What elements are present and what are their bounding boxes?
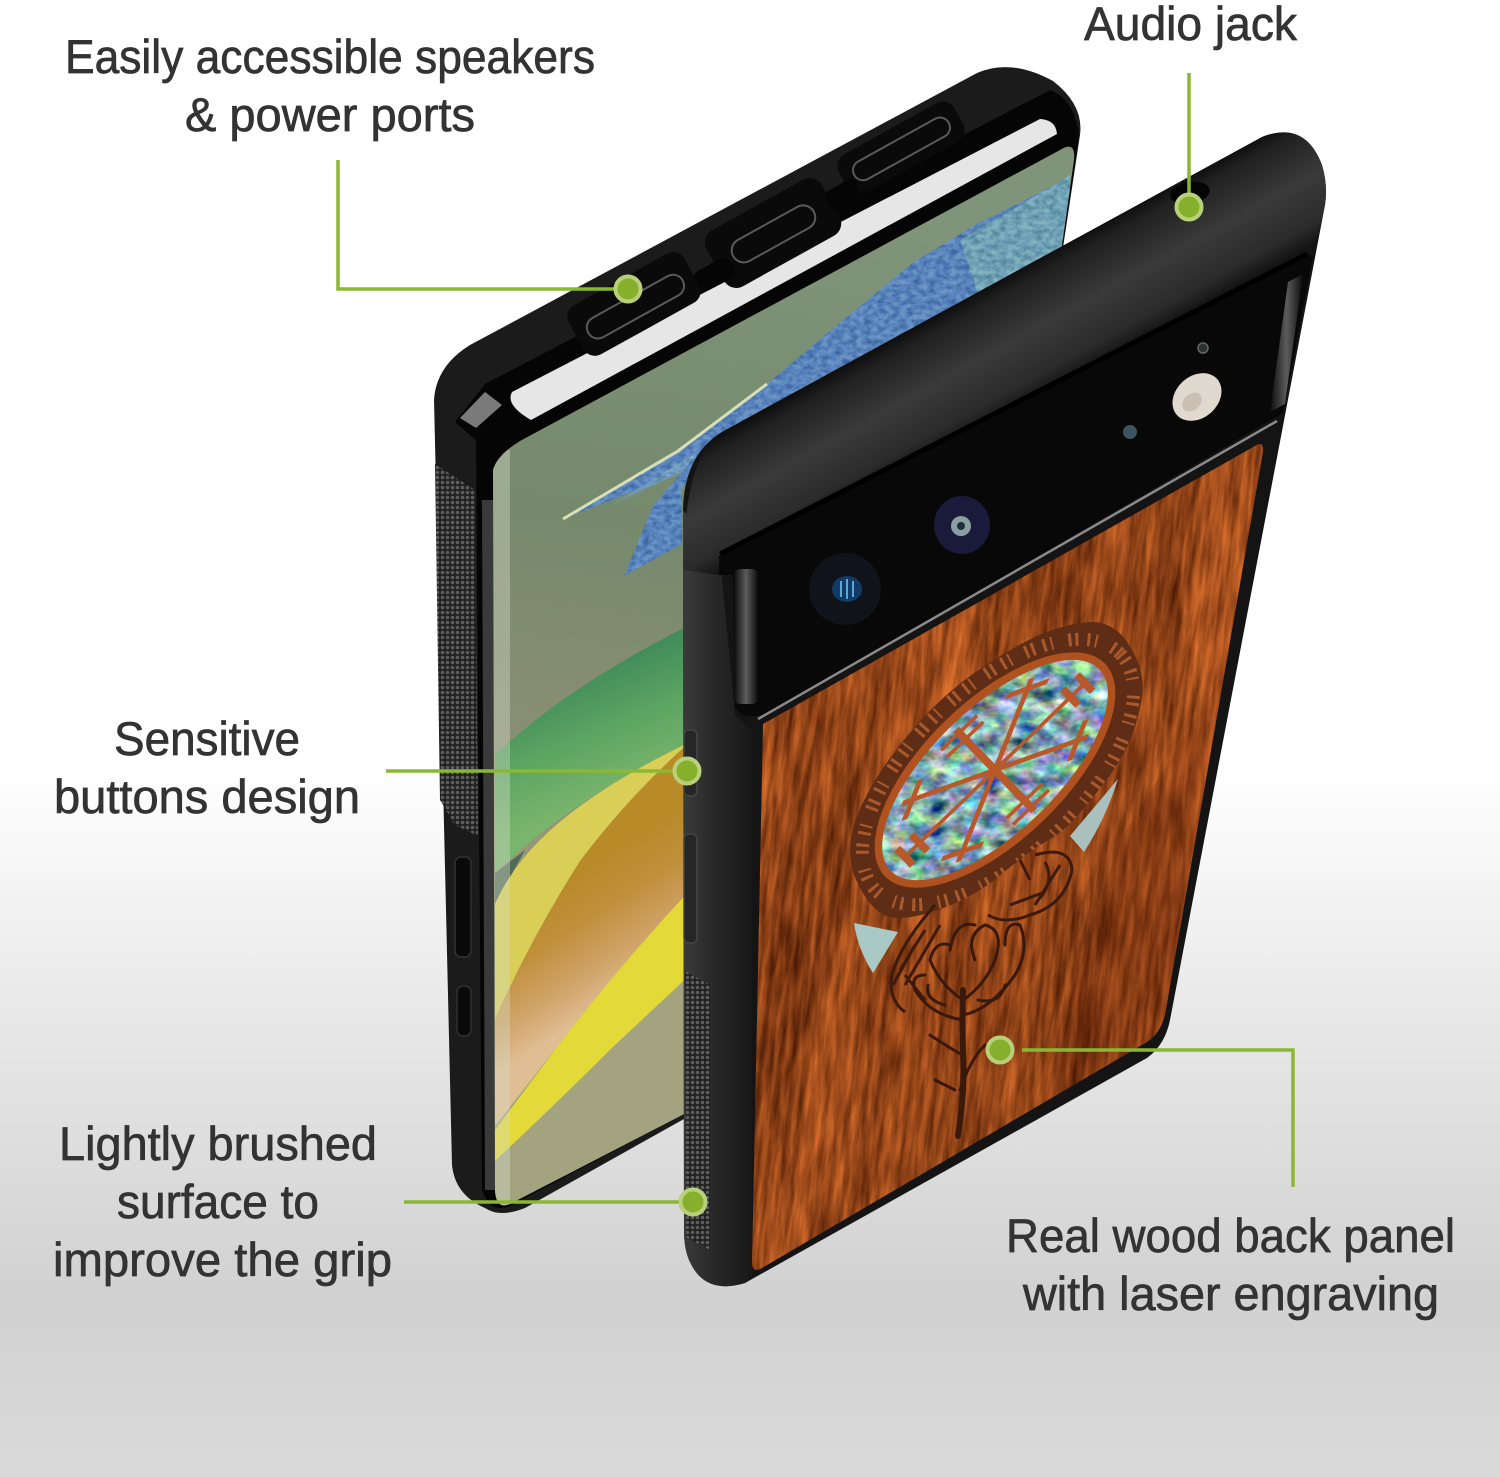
speaker and port cutouts bbox=[563, 97, 969, 360]
green leaf bbox=[495, 625, 690, 873]
engraved compass medallion bbox=[850, 622, 1143, 973]
pale lower screen bbox=[495, 975, 690, 1210]
inner wood rim bbox=[874, 652, 1116, 888]
front view phone bbox=[434, 67, 1090, 1215]
connector line bbox=[1187, 73, 1191, 195]
side inner strip bbox=[482, 500, 495, 1190]
top band of case bbox=[683, 132, 1326, 575]
glossy inner bezel bbox=[455, 90, 1079, 1208]
abalone triangle left bbox=[854, 923, 898, 973]
bright yellow leaf bbox=[495, 890, 690, 1161]
dark leaf shadow bbox=[495, 850, 525, 905]
abalone inlay bbox=[882, 660, 1108, 880]
connector line bbox=[338, 160, 614, 289]
matte case shell bbox=[683, 132, 1326, 1286]
abalone triangle right bbox=[1070, 779, 1118, 852]
bar top lip bbox=[720, 254, 1307, 554]
rune ring bbox=[850, 622, 1143, 918]
small sensor bbox=[1123, 425, 1137, 439]
label bbox=[65, 30, 595, 141]
connector line bbox=[386, 769, 674, 773]
marker dot bbox=[1176, 194, 1202, 220]
label bbox=[54, 712, 360, 823]
marker dot bbox=[674, 758, 700, 784]
label: Real wood back panel bbox=[1006, 1209, 1455, 1262]
connector line bbox=[1022, 1050, 1293, 1187]
callout: real wood panel bbox=[988, 1038, 1455, 1320]
vegvisir strokes bbox=[894, 672, 1096, 868]
label: Sensitive bbox=[114, 712, 300, 765]
dragon engraving bbox=[891, 852, 1072, 1012]
grip texture bbox=[685, 971, 710, 1250]
glossy bar end left bbox=[734, 569, 758, 704]
pale yellow leaf edge bbox=[495, 742, 690, 1019]
label: with laser engraving bbox=[1022, 1267, 1439, 1320]
phone case outer shell bbox=[434, 67, 1080, 1213]
rear main lens bbox=[809, 553, 881, 625]
side buttons bbox=[455, 857, 471, 1036]
label: buttons design bbox=[54, 770, 360, 823]
marker dot bbox=[616, 276, 640, 302]
tree of life engraving bbox=[914, 924, 1024, 1136]
label bbox=[1006, 1209, 1455, 1320]
wood back panel bbox=[752, 444, 1264, 1270]
screen wallpaper bbox=[490, 140, 1090, 1215]
callout: brushed grip bbox=[53, 1117, 706, 1286]
label: Lightly brushed bbox=[59, 1117, 377, 1170]
white glass reflection bar bbox=[511, 119, 1057, 420]
marker dot bbox=[988, 1038, 1012, 1062]
label: Easily accessible speakers bbox=[65, 30, 595, 83]
side buttons bbox=[684, 730, 697, 943]
rear wide lens bbox=[934, 496, 990, 554]
callout: audio jack bbox=[1084, 0, 1297, 220]
connector line bbox=[404, 1200, 680, 1204]
left side of case bbox=[683, 510, 752, 1286]
glossy bar end right bbox=[1270, 274, 1303, 412]
marker dot bbox=[680, 1190, 706, 1214]
audio jack hole bbox=[1168, 179, 1212, 207]
back view phone bbox=[683, 132, 1326, 1286]
brown leaf body bbox=[495, 742, 690, 1126]
microphone bbox=[1198, 343, 1208, 353]
left grip texture bbox=[435, 464, 478, 836]
rune marks bbox=[856, 632, 1140, 912]
flash bbox=[1163, 363, 1231, 431]
label: & power ports bbox=[185, 88, 475, 141]
camera bar lower lip bbox=[758, 421, 1277, 719]
label: improve the grip bbox=[53, 1233, 392, 1286]
callout: sensitive buttons bbox=[54, 712, 700, 823]
blue feather leaf bbox=[560, 170, 1080, 580]
label: surface to bbox=[117, 1175, 319, 1228]
camera bar bbox=[719, 253, 1313, 716]
wood shading bbox=[1034, 674, 1224, 1108]
label bbox=[53, 1117, 392, 1286]
screen edge light strip bbox=[493, 450, 510, 1210]
callout: speakers and power ports bbox=[65, 30, 640, 302]
corner highlight bbox=[460, 392, 502, 428]
